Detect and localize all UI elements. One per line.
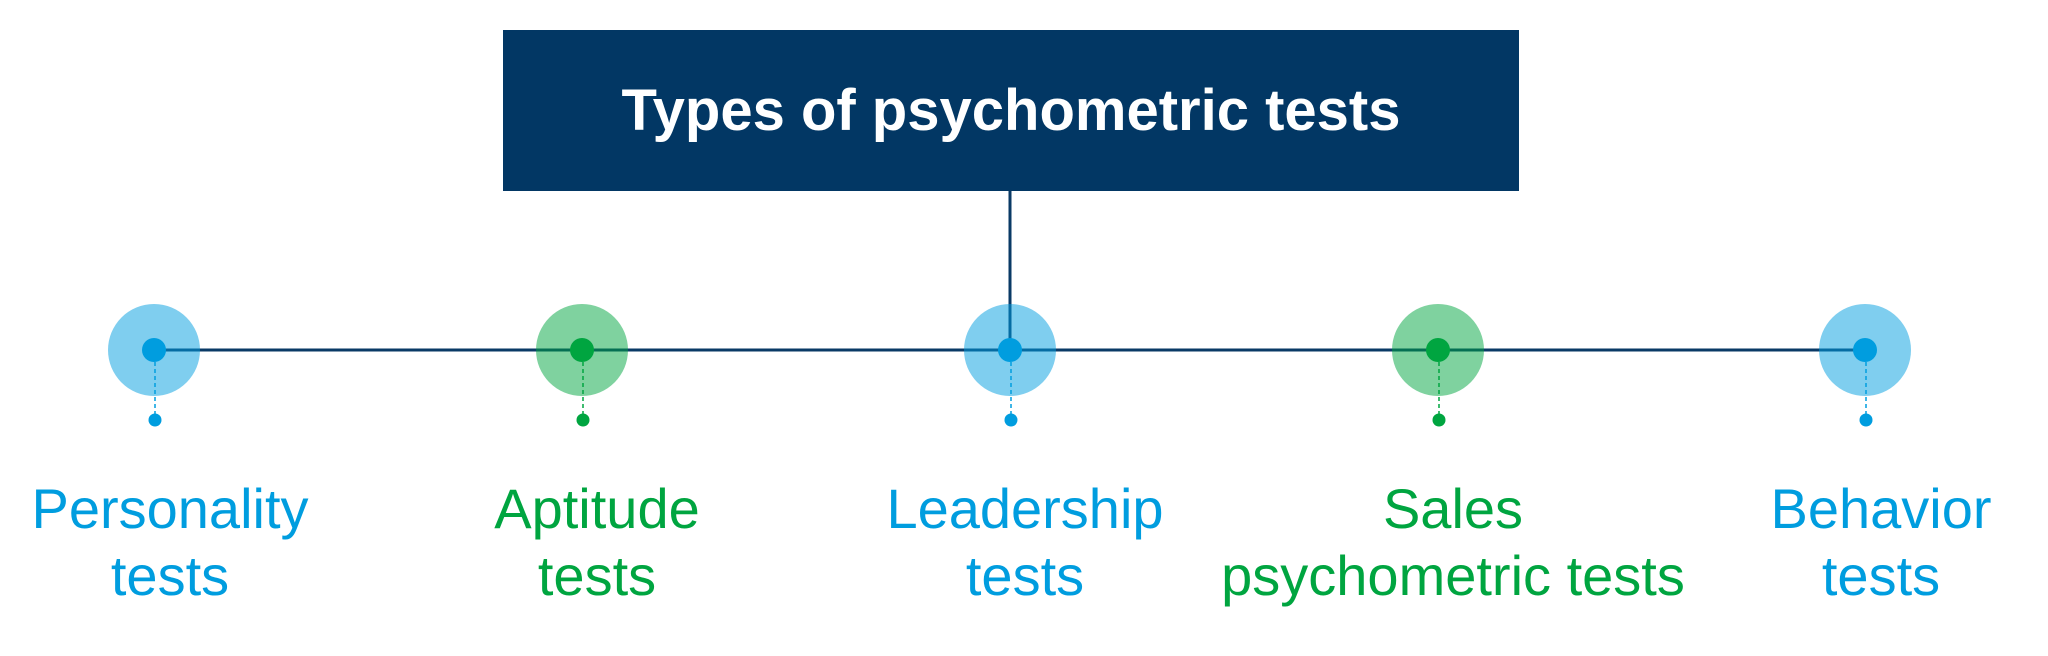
label: sales: psychometric tests — [1221, 544, 1685, 607]
horizontal timeline — [154, 348, 1865, 352]
label: sales: Sales — [1383, 477, 1523, 540]
label: leadership: tests — [966, 544, 1084, 607]
node: aptitude — [536, 304, 628, 426]
label: aptitude: tests — [538, 544, 656, 607]
title box — [503, 30, 1519, 191]
node: sales — [1392, 304, 1484, 426]
node: personality — [108, 304, 200, 426]
node: leadership — [964, 304, 1056, 426]
label: personality: tests — [111, 544, 229, 607]
node: behavior — [1819, 304, 1911, 426]
connector from title — [1008, 191, 1012, 350]
label: sales — [1221, 477, 1685, 607]
label: leadership — [886, 477, 1164, 607]
label: aptitude — [494, 477, 700, 607]
label: behavior: Behavior — [1770, 477, 1992, 540]
label: aptitude: Aptitude — [494, 477, 700, 540]
label: personality: Personality — [31, 477, 309, 540]
label: personality — [31, 477, 309, 607]
label: behavior: tests — [1822, 544, 1940, 607]
label: behavior — [1770, 477, 1992, 607]
title box: Types of psychometric tests — [622, 78, 1400, 143]
label: leadership: Leadership — [886, 477, 1164, 540]
